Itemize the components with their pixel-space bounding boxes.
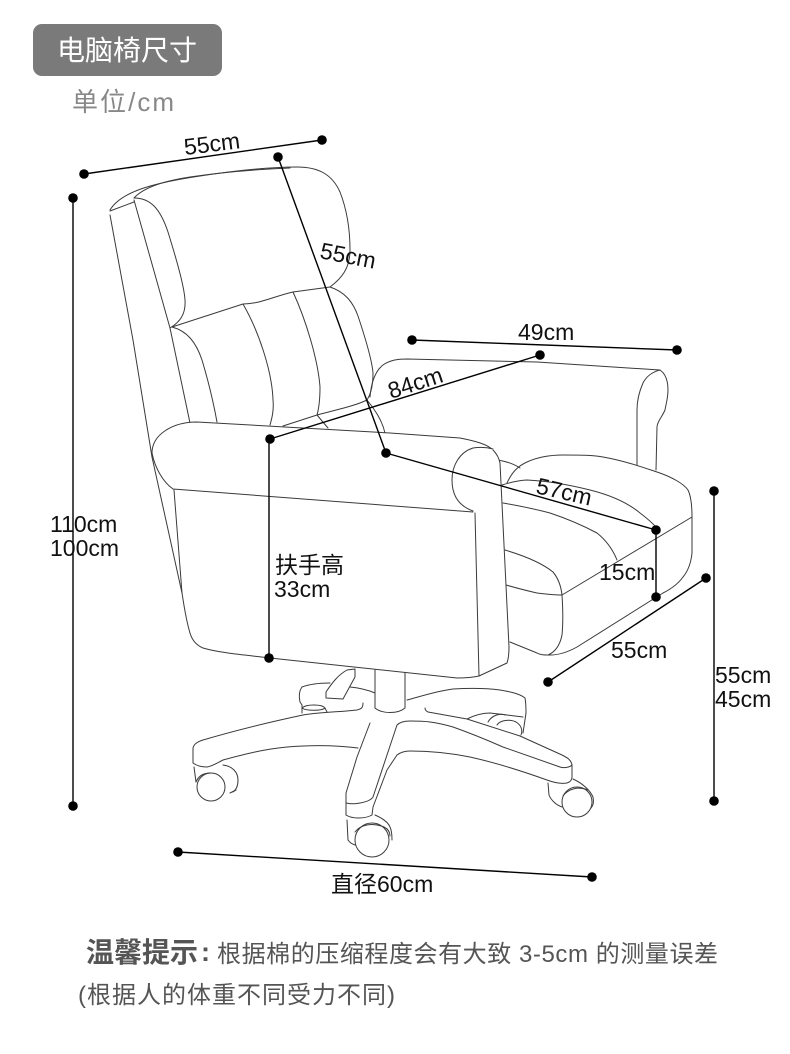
dimension: overall width: 84cm bbox=[385, 362, 446, 404]
dimension: cushion thickness: 15cm bbox=[599, 559, 655, 585]
tip text: : bbox=[201, 937, 210, 967]
five-star base bbox=[193, 688, 572, 818]
dimension: armrest height: 扶手高 bbox=[275, 552, 344, 578]
far armrest bbox=[370, 359, 668, 470]
dimension: backrest height bbox=[273, 152, 391, 458]
dimension: seat height: 45cm bbox=[715, 686, 771, 712]
dimension: seat width: 55cm bbox=[611, 637, 667, 663]
dimension: armrest height bbox=[264, 439, 344, 663]
dimension: armrest spacing bbox=[407, 319, 682, 355]
unit label: 单位/cm bbox=[72, 87, 174, 117]
dimension: seat depth: 57cm bbox=[534, 473, 595, 511]
dimension: total height: 110cm bbox=[50, 511, 117, 537]
dimension: overall width bbox=[265, 350, 545, 444]
title badge: 电脑椅尺寸 bbox=[57, 35, 197, 66]
dimension: seat width bbox=[543, 573, 711, 687]
dimension: base diameter: 直径60cm bbox=[331, 871, 433, 897]
dimension: backrest height: 55cm bbox=[318, 237, 378, 274]
tip text: (根据人的体重不同受力不同) bbox=[78, 982, 395, 1009]
back casters bbox=[302, 705, 526, 735]
tip text: 根据棉的压缩程度会有大致 3-5cm 的测量误差 bbox=[217, 941, 718, 968]
gas lift column and lever bbox=[299, 669, 405, 712]
seat cushion bbox=[497, 455, 692, 655]
caster: front bbox=[347, 815, 392, 857]
tip text bbox=[78, 937, 718, 1009]
dimension: seat depth bbox=[386, 453, 661, 535]
dimension: backrest width bbox=[79, 127, 327, 179]
dimension: backrest width: 55cm bbox=[182, 127, 241, 160]
dimension: seat height: 55cm bbox=[715, 662, 771, 688]
caster: left bbox=[194, 765, 238, 801]
dimension: total height: 100cm bbox=[50, 535, 119, 561]
dimension: cushion thickness bbox=[599, 530, 661, 602]
dimension: total height bbox=[50, 193, 119, 811]
dimension: armrest spacing: 49cm bbox=[518, 319, 574, 345]
dimension: base diameter bbox=[173, 847, 597, 897]
backrest bbox=[110, 167, 385, 457]
caster: right bbox=[548, 779, 593, 817]
front armrest and side panel bbox=[152, 422, 509, 678]
title badge bbox=[33, 24, 222, 76]
tip text: 温馨提示 bbox=[86, 937, 198, 968]
dimension: seat height bbox=[709, 486, 771, 806]
dimension: armrest height: 33cm bbox=[274, 576, 330, 602]
chair illustration bbox=[110, 167, 692, 857]
